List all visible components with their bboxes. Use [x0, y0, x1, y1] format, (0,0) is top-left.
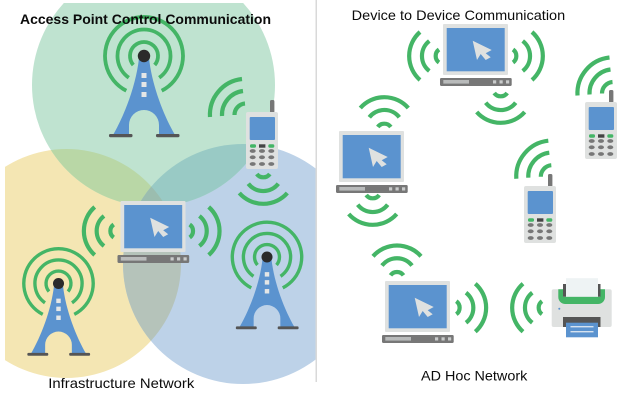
icon: printer signal waves	[512, 284, 542, 332]
icon: top access point tower	[105, 17, 183, 137]
icon: phone with signal waves	[210, 79, 287, 204]
heading: access point control communication: Access Point Control Communication	[20, 11, 271, 27]
icon: printer	[552, 278, 612, 337]
icon: bottom laptop with signal waves	[373, 245, 486, 343]
heading: device to device communication: Device to Device Communication	[352, 7, 565, 23]
icon: middle phone with signal waves	[516, 141, 556, 243]
coverage circles: green, yellow and blue overlapping	[5, 3, 316, 384]
panel: ad hoc network	[336, 7, 617, 384]
icon: lower right access point tower	[232, 222, 302, 329]
caption: infrastructure network: Infrastructure Network	[48, 375, 195, 391]
icon: top laptop with signal waves	[409, 24, 543, 123]
icon: laptop with signal waves	[84, 201, 220, 263]
panel: infrastructure network	[5, 3, 316, 388]
icon: lower left access point tower	[24, 249, 93, 356]
icon: top right phone with signal waves	[577, 58, 617, 159]
caption: ad hoc network: AD Hoc Network	[421, 368, 528, 384]
icon: left laptop with signal waves	[336, 97, 408, 225]
